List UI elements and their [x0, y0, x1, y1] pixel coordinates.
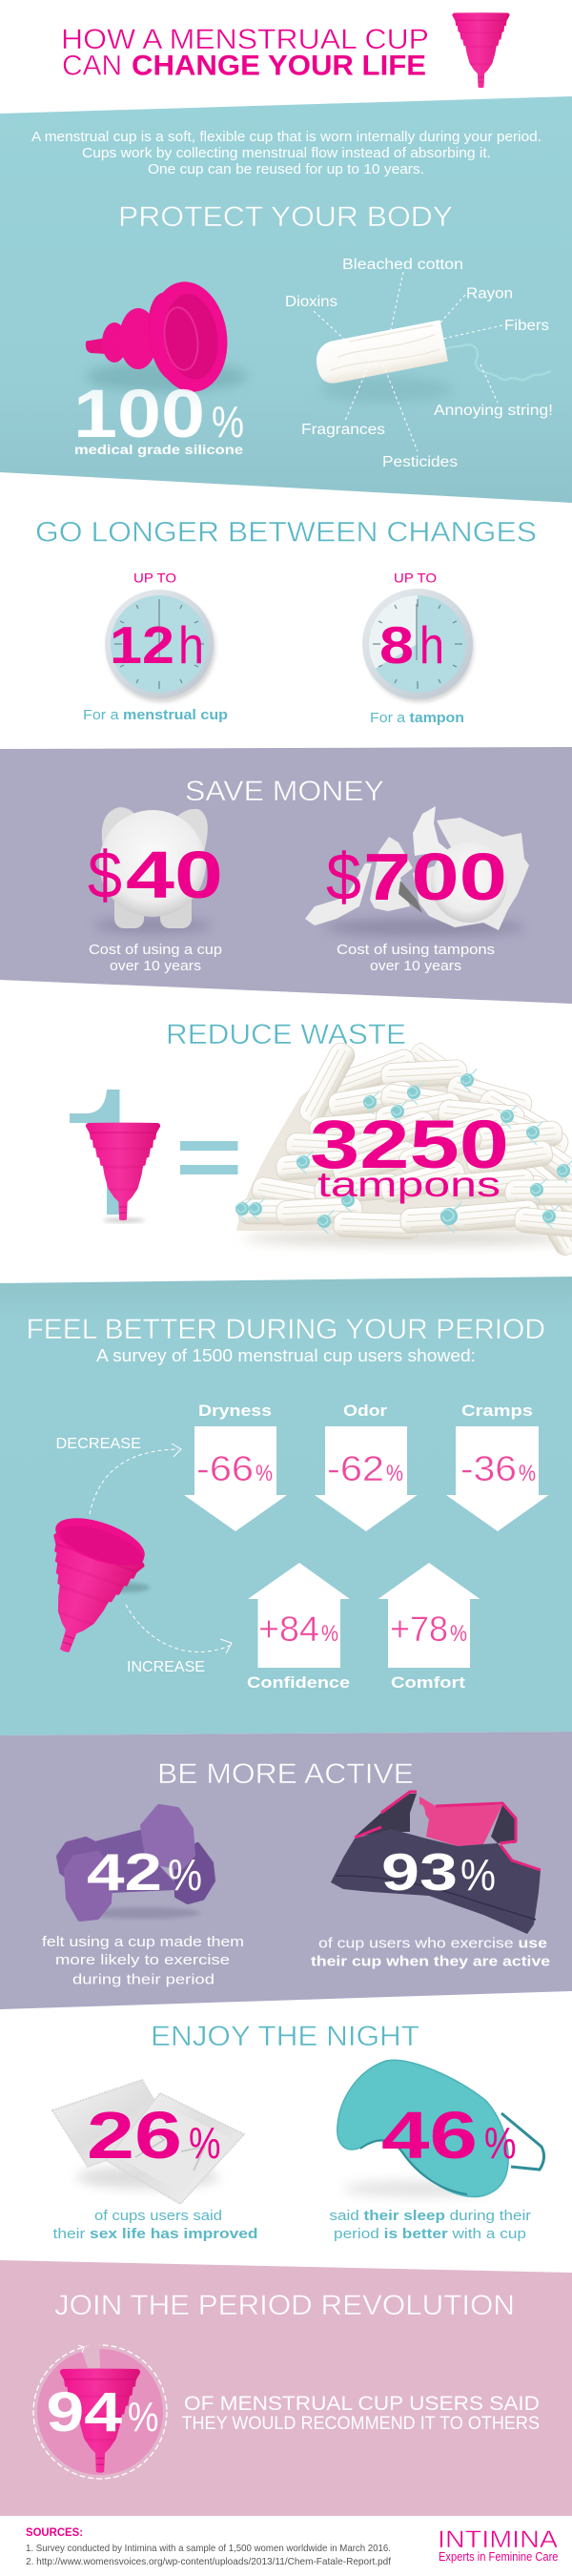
ingredient labels — [285, 257, 553, 470]
arrow: cramps decrease: -36 — [460, 1449, 517, 1488]
stat: 93 percent: % — [460, 1850, 496, 1900]
heading: JOIN THE PERIOD REVOLUTION — [54, 2290, 515, 2321]
heading: ENJOY THE NIGHT — [151, 2021, 419, 2052]
caption: their cup when they are active — [311, 1954, 550, 1969]
image: silicone cup on its side — [86, 277, 248, 397]
intro text: A menstrual cup is a soft, flexible cup that is worn internally during your period. — [31, 129, 541, 145]
stat: 93 percent — [381, 1842, 496, 1901]
image: pile of tampons — [235, 1039, 572, 1258]
stat: 40 dollars: 40 — [126, 838, 223, 912]
arrow: dryness decrease — [184, 1402, 287, 1531]
chart: 94 percent pie with cup: 94 — [46, 2381, 122, 2443]
ingredient labels: Pesticides — [382, 454, 458, 470]
sources: SOURCES: — [26, 2525, 83, 2539]
ingredient labels: Bleached cotton — [342, 257, 463, 273]
label and arrow: decrease — [55, 1436, 181, 1514]
stat: 46 percent — [381, 2098, 517, 2172]
clock: 8 hours for a tampon — [362, 571, 474, 726]
ingredient labels: Fibers — [504, 318, 549, 334]
panel: save money — [0, 747, 572, 1004]
heading: FEEL BETTER DURING YOUR PERIOD — [27, 1314, 545, 1345]
sources: 1. Survey conducted by Intimina with a sample of 1,500 women worldwide in March 2016. — [26, 2543, 391, 2554]
panel: reduce waste — [70, 1019, 572, 1258]
stat: 100 percent: 100 — [73, 377, 205, 452]
arrow: dryness decrease: Dryness — [198, 1402, 272, 1420]
caption — [330, 2208, 531, 2242]
intro text: Cups work by collecting menstrual flow instead of absorbing it. — [82, 145, 491, 161]
arrow: confidence increase: +84 — [258, 1610, 319, 1649]
heading: GO LONGER BETWEEN CHANGES — [35, 517, 537, 548]
stat: 100 percent: % — [212, 397, 244, 447]
arrow: cramps decrease: % — [519, 1461, 536, 1486]
clock: 8 hours for a tampon: UP TO — [394, 571, 437, 586]
recommendation text: OF MENSTRUAL CUP USERS SAID — [184, 2393, 540, 2415]
arrow: comfort increase: % — [450, 1621, 467, 1647]
heading: PROTECT YOUR BODY — [118, 201, 453, 233]
stat: 3250 tampons: tampons — [317, 1165, 500, 1204]
stat: 26 percent: % — [189, 2118, 221, 2168]
stat: 100 percent — [73, 377, 244, 457]
ingredient labels: Rayon — [466, 286, 513, 301]
clock: 12 hours for a cup: h — [178, 615, 204, 675]
caption — [53, 2208, 257, 2242]
stat: 42 percent: % — [168, 1850, 202, 1900]
recommendation text — [181, 2393, 540, 2434]
arrow: odor decrease: % — [386, 1461, 403, 1486]
stat: 3250 tampons — [310, 1108, 509, 1204]
intro text — [31, 129, 541, 177]
arrow: cramps decrease — [446, 1402, 549, 1531]
image: condom packets — [52, 2080, 244, 2204]
panel: intro and protect your body — [0, 96, 572, 503]
heading: REDUCE WASTE — [166, 1019, 406, 1050]
image: whole piggy bank — [93, 807, 212, 933]
caption: Cost of using tampons — [337, 942, 495, 958]
caption — [42, 1934, 244, 1988]
heading: SAVE MONEY — [185, 776, 384, 807]
arrow: comfort increase: Comfort — [391, 1673, 465, 1692]
panel: go longer between changes — [35, 517, 537, 726]
caption: of cup users who exercise use — [318, 1935, 547, 1952]
caption: their sex life has improved — [53, 2226, 257, 2242]
logo: Intimina — [438, 2526, 559, 2564]
title — [61, 24, 429, 82]
arrow: cramps decrease: Cramps — [461, 1402, 533, 1420]
title: HOW A MENSTRUAL CUP — [61, 24, 429, 55]
image: broken piggy bank — [305, 806, 529, 936]
stat: 42 percent: 42 — [87, 1842, 162, 1901]
caption: during their period — [72, 1971, 214, 1988]
caption — [89, 942, 222, 974]
stat: 700 dollars: 700 — [363, 840, 507, 914]
caption: felt using a cup made them — [42, 1934, 244, 1950]
panel: join the period revolution — [0, 2260, 572, 2516]
arrow: confidence increase: % — [321, 1621, 338, 1647]
caption: of cups users said — [94, 2208, 222, 2224]
equals sign — [180, 1141, 238, 1174]
arrow: confidence increase: Confidence — [247, 1673, 350, 1692]
clock: 12 hours for a cup: 12 — [110, 615, 174, 675]
logo: Intimina: INTIMINA — [438, 2526, 558, 2553]
label and arrow: increase — [126, 1605, 232, 1675]
stat: 26 percent: 26 — [87, 2098, 182, 2172]
clock: 12 hours for a cup: UP TO — [133, 571, 176, 586]
caption: more likely to exercise — [55, 1952, 230, 1968]
sources: 2. http://www.womensvoices.org/wp-content/uploads/2013/11/Chem-Fatale-Report.pdf — [26, 2556, 391, 2567]
clock: 8 hours for a tampon: 8 — [379, 615, 414, 675]
clock: 12 hours for a cup: For a menstrual cup — [83, 707, 228, 723]
header — [61, 12, 510, 88]
big numeral one with cup — [70, 1090, 160, 1223]
stat: 40 dollars — [88, 838, 223, 912]
sources — [26, 2525, 391, 2567]
chart: 94 percent pie with cup — [33, 2342, 167, 2479]
image: tilted cup — [19, 1508, 151, 1667]
arrow: odor decrease — [315, 1402, 418, 1531]
arrow: dryness decrease: -66 — [196, 1449, 254, 1488]
recommendation text: THEY WOULD RECOMMEND IT TO OTHERS — [181, 2413, 540, 2434]
stat: 26 percent — [87, 2098, 221, 2172]
logo: Intimina: Experts in Feminine Care — [439, 2550, 559, 2564]
caption: over 10 years — [370, 958, 461, 974]
stat: 42 percent — [87, 1842, 202, 1901]
arrow: comfort increase: +78 — [390, 1610, 448, 1649]
ingredient labels: Annoying string! — [434, 403, 553, 419]
stat: 46 percent: 46 — [381, 2098, 478, 2172]
arrow: confidence increase — [247, 1563, 350, 1692]
heading: BE MORE ACTIVE — [157, 1758, 414, 1790]
clock: 8 hours for a tampon: h — [419, 615, 444, 675]
caption: over 10 years — [110, 958, 201, 974]
arrow: dryness decrease: % — [255, 1461, 273, 1486]
icon: menstrual cup — [452, 12, 510, 88]
arrow: odor decrease: -62 — [327, 1449, 384, 1488]
panel: enjoy the night — [52, 2021, 544, 2242]
title: CHANGE YOUR LIFE — [132, 50, 426, 82]
clock: 12 hours for a cup — [83, 571, 228, 723]
image: sleep mask — [337, 2060, 544, 2197]
stat: 93 percent: 93 — [381, 1842, 458, 1901]
label and arrow: increase: INCREASE — [127, 1659, 205, 1675]
image: tampon with string — [313, 320, 551, 403]
intro text: One cup can be reused for up to 10 years. — [148, 161, 424, 177]
caption: said their sleep during their — [330, 2208, 531, 2224]
caption — [337, 942, 495, 974]
image: sports bra — [331, 1792, 541, 1934]
clock: 8 hours for a tampon: For a tampon — [370, 710, 464, 726]
caption — [311, 1935, 550, 1969]
title: CAN — [62, 50, 122, 82]
stat: 700 dollars: $ — [326, 840, 361, 914]
image: dumbbells — [59, 1807, 213, 1919]
arrow: odor decrease: Odor — [343, 1402, 387, 1420]
label and arrow: decrease: DECREASE — [55, 1436, 141, 1452]
ingredient labels: Dioxins — [285, 294, 337, 310]
caption: period is better with a cup — [334, 2226, 526, 2242]
chart: 94 percent pie with cup: % — [128, 2394, 158, 2441]
caption: Cost of using a cup — [89, 942, 222, 958]
arrow: comfort increase — [378, 1563, 480, 1692]
stat: 46 percent: % — [484, 2118, 517, 2168]
stat: 100 percent: medical grade silicone — [74, 442, 243, 457]
subheading: A survey of 1500 menstrual cup users showed: — [96, 1346, 476, 1365]
panel: be more active — [0, 1732, 572, 2009]
stat: 40 dollars: $ — [88, 838, 122, 912]
stat: 700 dollars — [326, 840, 507, 914]
ingredient labels: Fragrances — [301, 422, 385, 438]
tampon ingredient callouts — [314, 272, 502, 451]
panel: feel better during your period — [0, 1277, 572, 1735]
stat: 3250 tampons: 3250 — [310, 1108, 509, 1183]
